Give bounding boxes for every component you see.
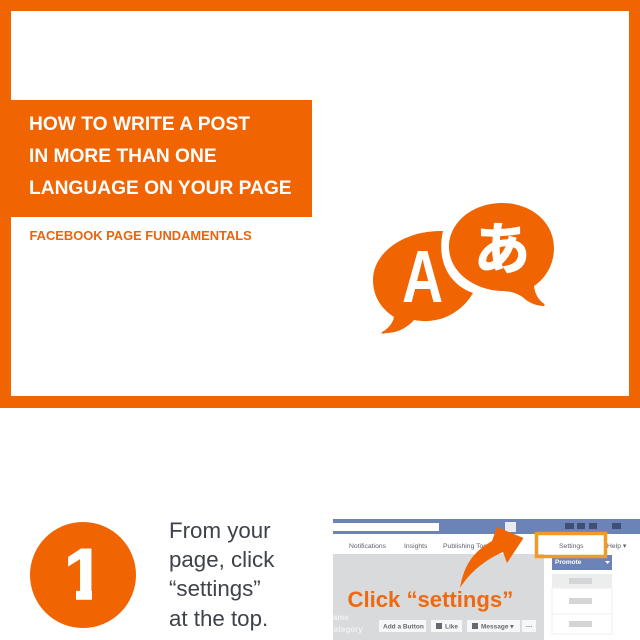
line 4: at the top. xyxy=(169,606,268,631)
orange highlight around settings xyxy=(536,534,606,556)
promote sidebar: Promote xyxy=(555,559,582,566)
step instructions xyxy=(169,518,274,631)
step number circle xyxy=(30,522,136,628)
navigation tabs: Publishing Tools xyxy=(443,543,493,550)
page name xyxy=(327,613,363,634)
cover photo xyxy=(333,554,544,640)
title line 3: LANGUAGE ON YOUR PAGE xyxy=(29,178,292,199)
icon: translation speech bubbles xyxy=(373,203,554,334)
subtitle: FACEBOOK PAGE FUNDAMENTALS xyxy=(30,228,252,243)
action buttons: Message ▾ xyxy=(481,624,514,630)
left bubble with letter A xyxy=(373,231,473,334)
title line 1: HOW TO WRITE A POST xyxy=(29,114,250,135)
right bubble with hiragana xyxy=(449,203,554,306)
panel: orange framed title card xyxy=(0,0,640,408)
facebook page screenshot xyxy=(333,519,640,640)
step number: 1 xyxy=(64,535,104,615)
action buttons: ··· xyxy=(526,624,532,630)
navigation tabs: Settings xyxy=(559,543,584,550)
action buttons xyxy=(379,620,536,632)
curved arrow to settings xyxy=(460,527,524,588)
action buttons: Like xyxy=(445,624,458,630)
action buttons: Add a Button xyxy=(383,624,424,630)
navigation tabs: Insights xyxy=(404,543,428,550)
line 1: From your xyxy=(169,518,271,543)
right bubble with hiragana: あ xyxy=(474,205,530,286)
left bubble with letter A: A xyxy=(402,236,443,319)
title band xyxy=(11,100,312,217)
promote sidebar xyxy=(552,555,612,634)
navigation tabs: Notifications xyxy=(349,543,387,550)
callout: click settings: Click “settings” xyxy=(348,587,513,612)
line 3: “settings” xyxy=(169,576,261,601)
title line 2: IN MORE THAN ONE xyxy=(29,146,217,167)
line 2: page, click xyxy=(169,547,274,572)
top blue bar xyxy=(333,519,640,534)
navigation tabs xyxy=(333,534,640,554)
navigation tabs: Help ▾ xyxy=(607,543,627,550)
